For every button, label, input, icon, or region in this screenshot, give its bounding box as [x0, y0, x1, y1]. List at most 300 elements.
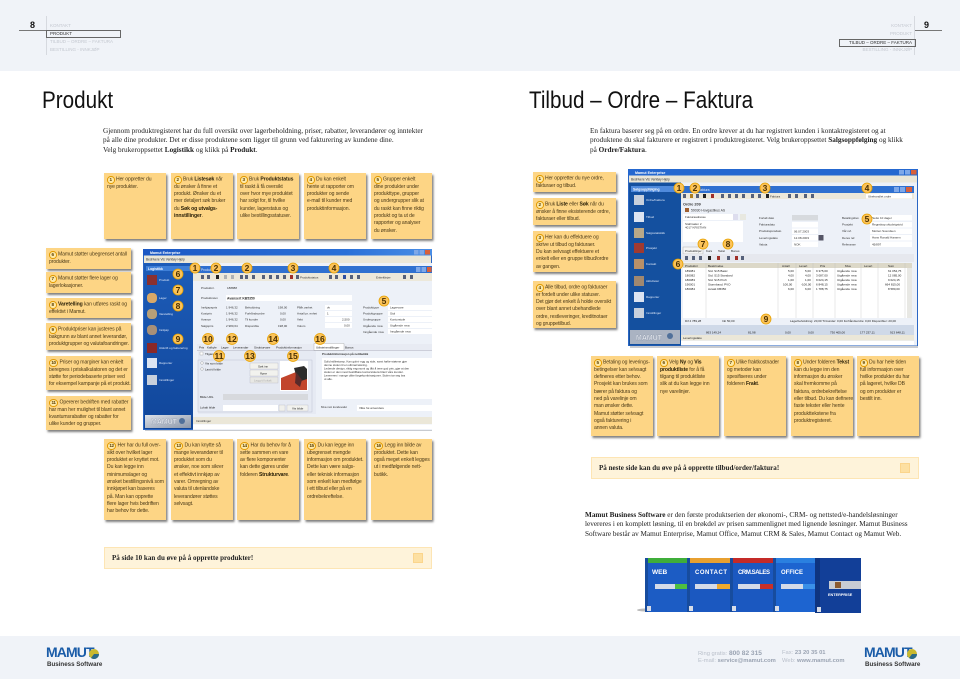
numbered callout badges: 7: [176, 285, 181, 295]
numbered callout badges: 9: [764, 314, 769, 324]
product form fields: Forhåndsordre: [245, 312, 265, 316]
note 13: Du kan knytte så: [184, 442, 221, 448]
totals row: Dif 4 789,28: [685, 319, 702, 323]
status bar: [193, 417, 432, 429]
tab bar: Bonus: [345, 346, 354, 350]
note right 5: ned på varelinje om: [594, 396, 637, 402]
product information text box: Produktinformasjon på nettbutikk: [322, 352, 369, 356]
note 14: 14: [242, 443, 247, 448]
note 14: Har du behov for å: [250, 442, 291, 448]
product information text box: stolen er den mest bestillbare kontorstolens blant våre kunder.: [324, 370, 404, 374]
order lines table: Std. S15 Basic: [708, 269, 728, 273]
product form fields: 2 980,64: [226, 324, 238, 328]
note right 6: nye varelinjer.: [660, 389, 690, 395]
order form: 4017 KRISTIAN: [685, 226, 706, 230]
order lines table: 4,00: [805, 274, 811, 278]
order lines table: Utgående mva: [837, 287, 857, 291]
note right 8: Under folderen Tekst: [803, 360, 849, 366]
picture panel with chair: Tilgang for nett: [205, 352, 225, 356]
note 2: mer detaljert søk bruker: [174, 198, 225, 204]
note 9: [46, 323, 131, 350]
page number 8 with navigation: BESTILLING - INNKJØP: [50, 47, 100, 52]
sidebar navigation: Salgsstatistikk: [646, 231, 666, 235]
product form fields: Kostpris: [201, 312, 212, 316]
note 12: produktet er knyttet mot.: [107, 457, 159, 463]
numbered callout badges: 8: [726, 239, 731, 249]
note right 2: Bruk Liste eller Søk når du: [545, 202, 604, 208]
note 7: 7: [51, 276, 54, 281]
callout: øve på produkter: [104, 547, 432, 569]
order lines table: 5,00: [788, 269, 794, 273]
sidebar navigation: [629, 182, 681, 346]
note 10: for eksempel kampanje på et produkt.: [49, 381, 131, 387]
tabs and grid toolbar: Tekst: [718, 249, 725, 253]
note right 3: enkelt eller en gruppe tilbud/ordre: [536, 256, 608, 262]
product form fields: Salgspris: [201, 324, 214, 328]
order lines table: 664 815,00: [885, 282, 900, 286]
note right 7: Ulike fraktkostnader: [736, 360, 779, 366]
note 2: [171, 173, 233, 239]
note right 5: [591, 356, 653, 436]
note right 6: Velg Ny og Vis: [669, 360, 702, 366]
note 13: selvsagt.: [174, 501, 193, 507]
note right 4: er fordelt under ulike statuser.: [536, 292, 600, 298]
intro text: Tilbud Ordre Faktura: [590, 126, 903, 154]
sidebar navigation: Lager: [159, 296, 167, 300]
note right 9: på lageret, hvilke DB: [860, 381, 905, 387]
window frame and title bar: Bedrivere Vis Verktøy Hjelp: [631, 178, 670, 182]
product form fields: Avansert KB5350: [227, 296, 255, 300]
order lines table: 100,00: [783, 282, 793, 286]
sidebar navigation: Aktiviteter: [646, 279, 659, 283]
numbered callout badges: [173, 263, 389, 362]
sidebar navigation: MAMUT: [636, 335, 663, 342]
text: Mamut Business Software: [585, 510, 908, 538]
order lines table: 3 087,00: [816, 274, 828, 278]
product form fields: [201, 286, 432, 334]
main content area: Produkter: [201, 268, 217, 272]
note 5: 5: [376, 177, 379, 182]
note 16: [371, 439, 432, 520]
note 9: bakgrunn av blant annet leverandør,: [49, 334, 127, 340]
note 11: 11: [51, 400, 56, 405]
note right 1: fakturaer og tilbud.: [536, 183, 576, 189]
numbered callout badges: 1: [193, 263, 198, 273]
note right 8: produktregisteret.: [794, 418, 832, 424]
product form fields: Antall pr. enhet: [297, 312, 317, 316]
tab bar: Strukturvare: [254, 346, 271, 350]
note 9: 9: [51, 327, 54, 332]
note 10: [46, 356, 131, 390]
product form fields: Vekt: [297, 318, 303, 322]
numbered callout badges: [673, 183, 872, 324]
note 4: e-mail til kunder med: [307, 198, 352, 204]
sidebar navigation: Varetelling: [159, 312, 173, 316]
tabs and grid toolbar: [681, 247, 914, 262]
order form: Regnskap oktobrigstrid: [872, 222, 903, 226]
note 2: du Søk og utvalgs-: [174, 206, 217, 212]
note 9: Produktpriser kan justeres på: [58, 326, 121, 332]
note right 1: 1: [538, 176, 541, 181]
order lines table: Utgående mva: [837, 269, 857, 273]
order form: Vår ref.: [842, 229, 852, 233]
product form fields: Volum: [297, 324, 306, 328]
note 14: folderen Strukturvare.: [240, 472, 289, 478]
picture panel with chair: Last til bilde: [205, 368, 221, 372]
note right 4: Det gjør det enkelt å holde oversikt: [536, 299, 611, 305]
numbered callout badges: 4: [865, 183, 870, 193]
note right 8: [791, 356, 853, 436]
tab bar: Utlisteinnstillinger: [316, 346, 339, 350]
note 15: ordrebekreftelse.: [307, 494, 344, 500]
picture panel with chair: Søk inn: [258, 364, 269, 368]
note right 1: Her oppretter du nye ordre,: [545, 176, 604, 182]
note right 3: av gangen.: [536, 264, 560, 270]
note right 9: full informasjon over: [860, 367, 903, 373]
note right 2: [533, 198, 616, 225]
note right 9: og om produkter er: [860, 389, 901, 395]
intro text: Tilbud Ordre Faktura: på Ordre/Faktura.: [590, 146, 647, 154]
note 14: av flere komponenter: [240, 457, 286, 463]
footer contact info: Web: www.mamut.com: [782, 658, 845, 664]
note 7: lagerlokasjoner.: [49, 283, 83, 289]
intro text: Tilbud Ordre Faktura: produktene du skal fakturere er registrert i produktregisteret. Velg brukeroppsettet Salgsoppfølging og klikk: [590, 136, 903, 144]
box: ENTERPRISE: ENTERPRISE: [828, 593, 853, 597]
note 13: mange leverandører til: [174, 450, 223, 456]
footer band: [0, 636, 960, 679]
page number 9 with navigation: KONTAKT: [891, 23, 912, 28]
note 8: 8: [51, 302, 54, 307]
product form fields: Lagervare: [390, 306, 404, 310]
product form fields: Produkttype: [363, 306, 379, 310]
sidebar navigation: Innkjøp: [159, 328, 169, 332]
note 2: innstillinger.: [174, 213, 203, 219]
numbered callout badges: 1: [677, 183, 682, 193]
note right 4: [533, 281, 616, 328]
note 5: du ønsker.: [374, 228, 397, 234]
note right 5: Prosjekt kan brukes som: [594, 381, 647, 387]
order lines table: Levert: [799, 264, 808, 268]
sidebar navigation: [144, 263, 193, 429]
callout: øve på tilbud/ordre/faktura: På neste side kan du øve på å opprette tilbud/order/faktura!: [599, 464, 779, 472]
main content area with toolbar: Faktura: [770, 194, 781, 198]
numbered callout badges: 6: [676, 259, 681, 269]
note 12: flere lager hvis bedriften: [107, 501, 159, 507]
main content area with toolbar: Ubehandlet ordre: [868, 194, 892, 198]
order form: Stallmalen 2: [685, 222, 702, 226]
note 16: 16: [376, 443, 381, 448]
note 14: sette sammen en vare: [240, 450, 288, 456]
note 13: leverandører støttes: [174, 494, 218, 500]
heading: Tilbud Ordre Faktura: Tilbud – Ordre – Faktura: [529, 87, 753, 114]
order lines table: 180084: [685, 287, 695, 291]
sidebar navigation: Produkt: [159, 278, 170, 282]
order lines table: 9 024,15: [888, 278, 900, 282]
note 12: 12: [109, 443, 114, 448]
order lines table: 1,00: [805, 278, 811, 282]
sidebar navigation: Ordre/Faktura: [646, 198, 665, 202]
note 13: ønsker, noe som sikrer: [174, 464, 223, 470]
product form fields: Til kunder: [245, 318, 258, 322]
order form: Deres ref.: [842, 236, 855, 240]
numbered callout badges: 11: [214, 351, 224, 361]
product form fields: Disponible: [245, 324, 259, 328]
product form fields: Produktnavn: [201, 296, 218, 300]
text: Mamut Business Software: Software består av Mamut Enterprise, Mamut Office, Mamut CRM & Sales, Mamut Contact og Mamut Web.: [585, 530, 901, 538]
note 5: du raskt kan finne riktig: [374, 206, 424, 212]
order lines table: 5,00: [805, 269, 811, 273]
picture panel with chair: Legg til lokalt: [254, 378, 272, 382]
note 4: [304, 173, 366, 239]
numbered callout badges: 2: [693, 183, 698, 193]
note 5: produkt og ta ut de: [374, 213, 415, 219]
sidebar navigation: Innstillinger: [646, 311, 661, 315]
order form: Fakturadato: [759, 222, 775, 226]
page number 9 with navigation: TILBUD – ORDRE – FAKTURA: [849, 40, 912, 44]
note right 3: skrive ut tilbud og fakturaer.: [536, 242, 595, 248]
note 8: effektivt i Mamut.: [49, 309, 86, 315]
order lines table: 12 085,00: [888, 274, 902, 278]
order lines table: Std. S15 Standard: [708, 274, 733, 278]
order lines table: 61 054,75: [888, 269, 902, 273]
note right 5: 5: [596, 360, 599, 365]
order lines table: Utgående mva: [837, 274, 857, 278]
note 13: 13: [176, 443, 181, 448]
note 7: Mamut støtter flere lager og: [58, 276, 118, 282]
note right 3: Her kan du effektuere og: [545, 234, 599, 240]
order lines table: Sum: [888, 264, 895, 268]
product form fields: 1 946,32: [226, 318, 238, 322]
picture panel with chair: Vis som bilde: [205, 362, 223, 366]
totals row: 913 648,11: [890, 330, 905, 334]
order lines table: Utgående mva: [837, 278, 857, 282]
note 14: [237, 439, 299, 520]
totals row: 730 405,00: [830, 330, 845, 334]
tabs and grid toolbar: Bonus: [731, 249, 740, 253]
screenshot: Mamut order window: [628, 169, 918, 348]
sidebar navigation: Rapporter: [159, 361, 172, 365]
callout: øve på tilbud/ordre/faktura: [591, 457, 919, 479]
order lines table: 180082: [685, 274, 695, 278]
note 1: [104, 173, 166, 239]
note 13: et effektivt innkjøp av: [174, 472, 219, 478]
product information text box: Mva mot kundevalut: [321, 405, 347, 409]
numbered callout badges: 3: [763, 183, 768, 193]
note right 3: 3: [538, 235, 541, 240]
note 3: ulike bestillingsstatuser.: [240, 213, 291, 219]
window frame and title bar: [143, 249, 432, 430]
note 15: [304, 439, 366, 520]
product information text box: [321, 352, 432, 411]
order lines table: Pris: [820, 264, 826, 268]
note 5: og undergrupper slik at: [374, 198, 424, 204]
totals row: 863 149,24: [706, 330, 721, 334]
note 4: Du kan enkelt: [316, 176, 346, 182]
totals row: 177 237,11: [860, 330, 875, 334]
picture panel with chair: Vis bilde: [292, 406, 304, 410]
note right 9: bestilt inn.: [860, 396, 882, 402]
status bar: Innstillinger: [196, 419, 211, 423]
screenshot: Mamut Enterprise product window: [143, 249, 432, 431]
product information text box: Solid stillestamp. Kan gulvt- egg og side, samt høfte-støtene gjør: [324, 360, 407, 364]
order form: Netto 10 dager: [872, 216, 892, 220]
note 6: Mamut støtter ubegrenset antall: [58, 252, 127, 258]
note 16: også meget enkelt legges: [374, 457, 430, 463]
totals row: Lagerbeholdning: 20,00 Til kunder: 0,00 Forhåndsordre: 0,00 Disponibler: 20,00: [790, 319, 896, 323]
note 7: [46, 272, 131, 293]
note 15: Dette kan være salgs-: [307, 464, 355, 470]
note right 9: [857, 356, 919, 436]
note right 4: 4: [538, 285, 541, 290]
intro text: Produkt: Gjennom produktregisteret har du full oversikt over lagerbeholdning, priser, rabatter, leverandører og inntekter: [103, 126, 423, 134]
note 5: Grupper enkelt: [383, 176, 415, 182]
note right 6: produktliste for å få: [660, 367, 704, 373]
note right 5: defineres etter behov.: [594, 374, 641, 380]
note right 9: hvilke produkter du har: [860, 374, 910, 380]
note right 8: eller tilbud. Du kan definere: [794, 396, 853, 402]
order lines table: 1 788,75: [816, 287, 828, 291]
note right 4: ordre, restleveringer, kreditnotaer: [536, 314, 608, 320]
product form fields: Påfh.varhet: [297, 306, 313, 310]
product form fields: 1: [327, 312, 329, 316]
note 15: Du kan legge inn: [318, 442, 354, 448]
note 14: kan dette gjøres under: [240, 464, 289, 470]
logo: Mamut Business Software left: Business Software: [47, 661, 102, 668]
intro text: Produkt: Velg brukeroppsettet Logistikk og klikk på Produkt.: [103, 146, 258, 154]
note 6: [46, 248, 131, 269]
sidebar navigation: Tilbud: [646, 215, 654, 219]
footer contact info: E-mail: service@mamut.com: [698, 658, 776, 664]
logo: Mamut Business Software left: MAMUT: [46, 644, 94, 660]
order form: Produksjonsdato: [759, 229, 782, 233]
intro text: Produkt: på alle dine produkter. Det er disse produktene som ligger til grunn ved fakturering av kundene dine.: [103, 136, 394, 144]
note right 5: også fakturering i: [594, 418, 631, 424]
note right 3: [533, 231, 616, 272]
note 8: [46, 298, 131, 318]
note right 5: Mamut støtter selvsagt: [594, 411, 643, 417]
order form: Fakturaadresse: [685, 215, 706, 219]
note 13: [171, 439, 233, 520]
order lines table: Std. S15 Profi: [708, 278, 727, 282]
order lines table: Utgående mva: [837, 282, 857, 286]
numbered callout badges: 14: [268, 334, 278, 344]
page number 8 with navigation: TILBUD – ORDRE – FAKTURA: [50, 39, 113, 44]
note right 6: 6: [662, 360, 665, 365]
sidebar navigation: Rapporter: [646, 295, 659, 299]
note 9: produktgrupper og valutafoandringer.: [49, 341, 129, 347]
page number 9 with navigation: BESTILLING - INNKJØP: [862, 47, 912, 52]
footer contact info: [698, 650, 845, 664]
note 12: har behov for dette.: [107, 508, 149, 514]
tab bar: Leverandør: [233, 346, 248, 350]
note 16: produktet. Dette kan: [374, 450, 418, 456]
note 10: 10: [51, 360, 56, 365]
tabs and grid toolbar: Produktlinjer: [685, 249, 702, 253]
numbered callout badges: 6: [176, 269, 181, 279]
order form: Valuta: [759, 242, 768, 246]
note 13: valuta til utenlandske: [174, 486, 219, 492]
main content area: Produktstatus: [300, 276, 319, 280]
order form: NOK: [794, 242, 801, 246]
note 6: produkter.: [49, 259, 71, 265]
product form fields: 1 946,32: [226, 306, 238, 310]
note right 2: ønsker å finne eksisterende ordre,: [536, 209, 610, 215]
note 12: på. Man kan opprette: [107, 494, 153, 500]
note 11: har man her mulighet til blant annet: [49, 407, 125, 413]
totals row: 0,00: [785, 330, 791, 334]
note 4: 4: [309, 177, 312, 182]
product form fields: vk: [327, 306, 330, 310]
picture panel with chair: Lokalt bilde: [200, 406, 216, 410]
product form fields: 198,00: [278, 306, 288, 310]
page number 8 with navigation: KONTAKT: [50, 23, 71, 28]
note 4: hente ut rapporter om: [307, 184, 354, 190]
order form: 45/897: [872, 242, 882, 246]
note right 4: og gruppetilbud.: [536, 321, 571, 327]
window frame and title bar: Mamut Enterprise: [635, 171, 665, 175]
note 13: produktet som du: [174, 457, 212, 463]
order lines table: Beskrivelse: [708, 264, 724, 268]
totals row: 0,00: [808, 330, 814, 334]
note 5: produkttype, grupper: [374, 191, 419, 197]
product information text box: Vilke for-anvendere: [359, 406, 384, 410]
tab bar: [197, 344, 432, 350]
note right 8: produkttekstene fra: [794, 411, 836, 417]
picture panel with chair: [198, 351, 316, 414]
numbered callout badges: 5: [382, 296, 387, 306]
note 3: 3: [242, 177, 245, 182]
tab bar: Produktinformasjon: [276, 346, 302, 350]
order form: Betalingsbet.: [842, 216, 860, 220]
note right 4: Alle tilbud, ordre og fakturaer: [545, 284, 607, 290]
box: CONTACT: CONTACT: [695, 570, 727, 576]
product form fields: Inngående mva: [363, 330, 384, 334]
numbered callout badges: 15: [288, 351, 298, 361]
product form fields: Beholdning: [245, 306, 260, 310]
box: CONTACT: [687, 558, 730, 612]
note 3: kunder, lagerstatus og: [240, 206, 288, 212]
page number 9 with navigation: 9: [924, 20, 929, 30]
totals row: 81,98: [748, 330, 756, 334]
picture panel with chair: Bilde URL: [200, 395, 214, 399]
numbered callout badges: 3: [291, 263, 296, 273]
sidebar navigation: Utskrift og fakturering: [159, 346, 188, 350]
note 11: [46, 396, 131, 430]
note right 8: informasjon du ønsker: [794, 374, 842, 380]
page number 8 with navigation: PRODUKT: [50, 31, 72, 36]
note right 8: kan du legge inn den: [794, 367, 839, 373]
note 10: Priser og marginer kan enkelt: [60, 360, 123, 366]
note right 8: 8: [796, 360, 799, 365]
note 12: sikt over hvilket lager: [107, 450, 152, 456]
window frame and title bar: [628, 169, 918, 346]
order form: [683, 202, 912, 247]
note 15: i ett tilbud eller på en: [307, 486, 352, 492]
numbered callout badges: 13: [245, 351, 255, 361]
product form fields: 0,00: [344, 324, 350, 328]
main content area: Enkeltlinjer: [376, 276, 391, 280]
order form: Prosjekt: [842, 222, 853, 226]
order lines table: Levert: [864, 264, 873, 268]
note right 6: slik at du kan legge inn: [660, 381, 709, 387]
footer contact info: Fax: 23 20 35 01: [782, 650, 826, 656]
note right 3: Du kan selvsagt effektuere et: [536, 249, 599, 255]
numbered callout badges: 10: [203, 334, 213, 344]
note 11: ulike kunder og grupper.: [49, 421, 101, 427]
order lines table: 9 024,15: [816, 278, 828, 282]
order lines table: 190001: [685, 282, 695, 286]
tabs and grid toolbar: Kurs: [706, 249, 713, 253]
